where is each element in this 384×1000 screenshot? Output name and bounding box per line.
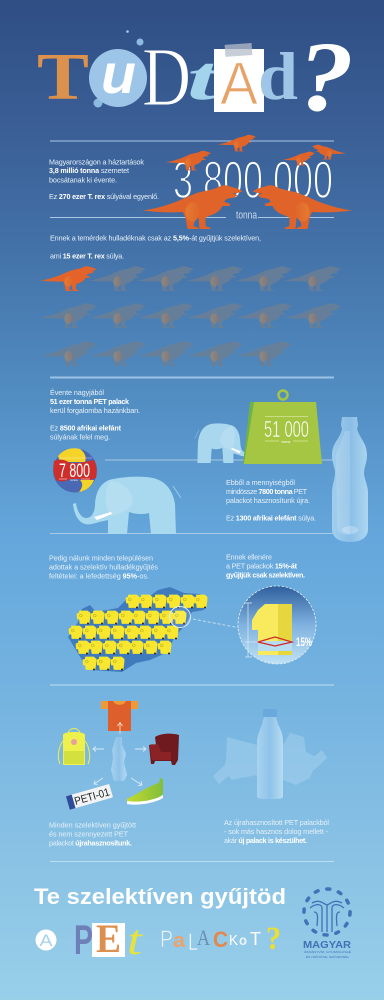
heading: footer: Te szelektíven gyűjtöd	[34, 884, 286, 909]
text: PET volume: Ez 8500 afrikai elefánt	[50, 424, 122, 432]
footer word PET: t	[127, 918, 144, 964]
text: household waste	[49, 158, 159, 201]
text: recycling: palackot újrahasznosítunk.	[49, 838, 132, 848]
footer word A: A	[40, 931, 53, 950]
footer word palackot: o	[239, 932, 247, 948]
footer word palackot: ?	[266, 921, 281, 957]
text: new bottle: - sok más hasznos dolog mellett -	[224, 827, 329, 836]
letter d: d	[258, 38, 298, 114]
text: selective share: ami 15 ezer T. rex súlya.	[50, 252, 124, 260]
logo: MAGYAR: MAGYAR	[303, 940, 352, 951]
text: PET volume: Évente nagyjából	[50, 388, 104, 397]
question mark: ?	[298, 21, 354, 132]
text: new bottle: akár új palack is készülhet.	[224, 836, 307, 845]
large bottle	[332, 417, 368, 542]
text: only 15%: gyűjtjük csak szelektíven.	[226, 570, 305, 580]
magnified bin 15%: 15%	[296, 635, 312, 649]
text: household waste: Magyarországon a háztartások	[49, 158, 144, 166]
letter T: T	[37, 40, 89, 114]
logo: MAGYAR: ÁSVÁNYVÍZ, GYÜMÖLCSLÉ	[304, 949, 351, 954]
footer word palackot: P	[160, 926, 173, 953]
text: household waste: Ez 270 ezer T. rex súlyával egyenlő.	[49, 192, 159, 201]
footer word palackot: a	[173, 930, 186, 952]
text: PET volume: súlyának felel meg.	[50, 432, 110, 442]
text: PET volume	[50, 388, 140, 442]
footer word palackot	[160, 921, 281, 957]
text: only 15%: a PET palackok 15%-át	[226, 562, 298, 570]
text: coverage	[49, 554, 158, 580]
footer word PET	[74, 916, 144, 964]
t-rex grid	[40, 266, 341, 366]
crushed bottle	[111, 737, 127, 781]
text: only 15%	[226, 552, 305, 580]
backpack	[58, 728, 90, 765]
title: Tudtad?	[37, 21, 354, 132]
text: only 15%: Ennek ellenére	[226, 552, 272, 562]
text: recycled amount	[226, 478, 316, 522]
t-shirt	[101, 701, 138, 731]
divider lines	[50, 141, 334, 218]
recycling arrows	[93, 722, 146, 786]
new bottle	[257, 709, 283, 799]
dashed connector	[193, 619, 240, 628]
text: coverage: feltételei: a lefedettség 95%-os.	[49, 572, 149, 580]
text: new bottle: Az újrahasznosított PET palackból	[224, 818, 329, 827]
letter t: t	[187, 45, 220, 113]
text: household waste: bocsátanak ki évente.	[49, 176, 117, 184]
large rexes	[142, 185, 242, 229]
large elephant	[73, 477, 181, 534]
logo: MAGYAR	[303, 889, 352, 959]
beach ball 7 800: tonna	[70, 478, 78, 482]
text: selective share	[50, 234, 261, 260]
footer word PET: P	[74, 916, 93, 963]
footer word palackot: L	[188, 929, 198, 956]
beach ball 7 800: 7 800	[59, 461, 90, 482]
text: household waste: 3,8 millió tonna szemetet	[49, 166, 129, 175]
text: PET volume: 51 ezer tonna PET palack	[50, 397, 129, 406]
magnified bin 15%	[238, 586, 316, 664]
small elephant	[195, 423, 252, 463]
footer word palackot: A	[197, 925, 210, 950]
text: recycled amount: Ez 1300 afrikai elefánt súlya.	[226, 514, 316, 522]
footer word palackot: K	[229, 932, 238, 949]
t-rex group	[142, 135, 352, 229]
beach ball 7 800	[53, 448, 97, 492]
unit: tonna: tonna	[236, 210, 258, 222]
text: recycling	[49, 820, 136, 848]
text: recycling: és nem szennyezett PET	[49, 830, 129, 838]
weight 51 000	[243, 390, 322, 464]
licence plate: PETI-01	[73, 786, 111, 808]
text: recycling: Minden szelektíven gyűjtött	[49, 820, 136, 830]
footer word PET: E	[96, 916, 121, 961]
text: recycled amount: mindössze 7800 tonna PET	[226, 487, 308, 496]
text: coverage: adottak a szelektív hulladékgyűjtés	[49, 562, 158, 572]
letter D: D	[142, 31, 191, 124]
text: coverage: Pedig nálunk minden településen	[49, 554, 153, 562]
crushed bottles	[213, 733, 327, 785]
footer word A	[36, 930, 56, 950]
weight 51 000: tonna	[282, 440, 290, 444]
footer word palackot: T	[250, 929, 261, 949]
weight 51 000: 51 000	[264, 416, 309, 442]
text: recycled amount: Ebből a mennyiségből	[226, 478, 295, 487]
text: new bottle	[224, 818, 329, 845]
armchair	[149, 734, 179, 765]
sneaker	[127, 778, 163, 805]
logo: MAGYAR: ÉS ÜDÍTŐITAL SZÖVETSÉG	[306, 954, 349, 959]
bubble with u	[89, 30, 147, 108]
text: recycled amount: palackot hasznosítunk újra.	[226, 496, 310, 505]
text: selective share: Ennek a temérdek hulladéknak csak az 5,5%-át gyűjtjük szelektíven,	[50, 234, 261, 242]
map of Hungary with bins	[68, 587, 207, 672]
footer word palackot: C	[213, 927, 228, 952]
bubble with u: u	[101, 42, 136, 105]
small rexes	[218, 135, 256, 151]
card with A: A	[220, 50, 258, 117]
text: PET volume: kerül forgalomba hazánkban.	[50, 406, 140, 415]
